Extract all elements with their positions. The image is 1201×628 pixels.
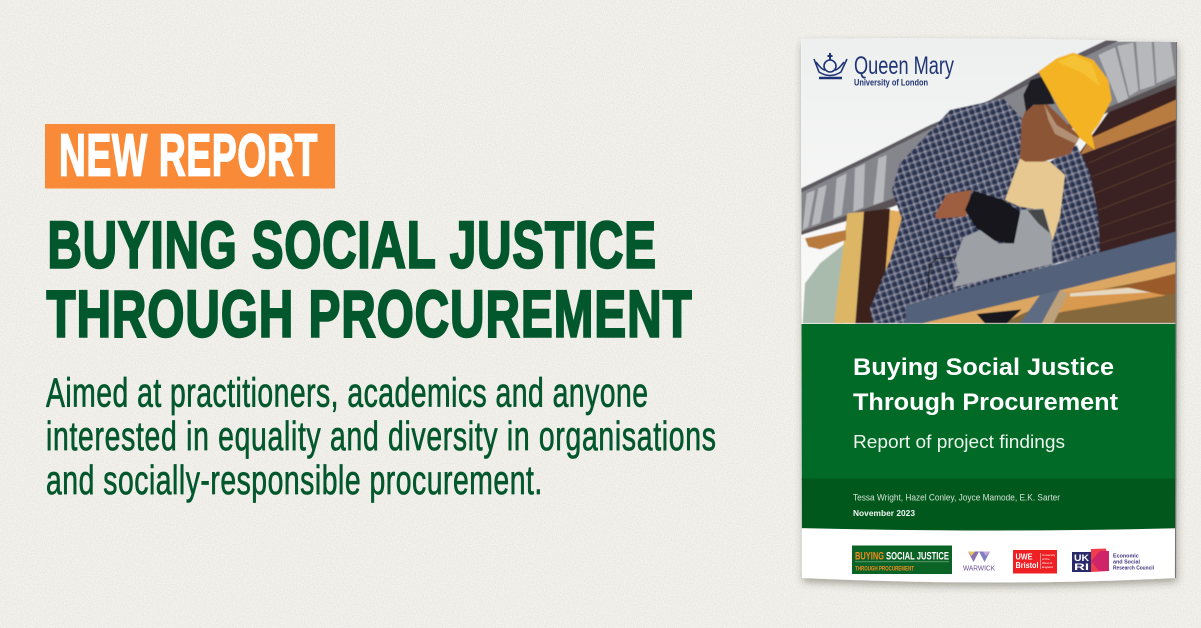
safety glasses	[1044, 104, 1079, 143]
ground under timber	[922, 260, 1176, 323]
logo: Queen Mary University of London	[814, 52, 954, 88]
logo: Queen Mary University of London: University of London	[854, 78, 928, 88]
logo: UWE Bristol	[1013, 550, 1057, 574]
logo: UKRI ESRC: and Social	[1113, 560, 1140, 566]
title	[46, 209, 692, 351]
title: THROUGH PROCUREMENT	[46, 278, 692, 351]
description text: and socially-responsible procurement.	[46, 458, 542, 503]
cover photo: construction worker with jigsaw	[801, 37, 1177, 324]
glove	[965, 191, 1022, 244]
dark wood underside	[1077, 83, 1177, 253]
cover date: November 2023	[853, 508, 915, 518]
title: BUYING SOCIAL JUSTICE	[48, 209, 656, 282]
logo: UWE Bristol: West of	[1042, 561, 1052, 565]
logo: UKRI ESRC: Economic	[1113, 554, 1139, 560]
timber	[922, 262, 1176, 323]
jigsaw	[953, 208, 1052, 287]
tree	[803, 243, 845, 323]
hair	[1023, 77, 1055, 112]
icon: crown	[814, 53, 847, 78]
logo: Buying Social Justice	[852, 546, 952, 574]
roof edge	[801, 40, 1118, 193]
right edge shade	[1176, 42, 1177, 578]
orange beam	[1080, 99, 1177, 155]
description text: Aimed at practitioners, academics and anyone	[46, 371, 648, 416]
logo: UWE Bristol: University	[1042, 553, 1056, 557]
posts	[834, 212, 864, 323]
face and neck	[1020, 103, 1080, 162]
logo: UKRI ESRC: UK	[1074, 553, 1090, 563]
cover authors: Tessa Wright, Hazel Conley, Joyce Mamode, E.K. Sarter	[853, 492, 1060, 502]
logo: Buying Social Justice: SOCIAL JUSTICE	[886, 550, 949, 562]
logo: Buying Social Justice: THROUGH PROCUREMENT	[855, 566, 914, 572]
logo: Warwick	[963, 552, 995, 572]
badge: new report: NEW REPORT	[59, 123, 317, 189]
shirt	[870, 98, 1100, 323]
logo: UKRI ESRC: Research Council	[1113, 566, 1154, 572]
logo: Queen Mary University of London: Queen Mary	[854, 52, 954, 80]
logo: UKRI ESRC	[1072, 548, 1154, 572]
logo: UWE Bristol: of the	[1042, 557, 1050, 561]
steel beam	[905, 232, 1176, 323]
steel strut	[1020, 290, 1060, 323]
logo: Warwick: WARWICK	[963, 564, 995, 572]
dark green author band	[795, 478, 1185, 530]
logo: UWE Bristol: Bristol	[1016, 561, 1038, 570]
roof	[801, 42, 1177, 233]
forearm	[935, 190, 972, 219]
description text: interested in equality and diversity in organisations	[46, 414, 716, 459]
cover heading: Through Procurement	[853, 389, 1118, 416]
cover subtitle: Report of project findings	[853, 431, 1065, 452]
logo: UKRI ESRC: RI	[1074, 562, 1089, 572]
hard hat	[1038, 53, 1112, 150]
description text	[46, 371, 716, 503]
undershirt	[1005, 158, 1065, 241]
cover heading: Buying Social Justice	[853, 354, 1114, 381]
logo: Buying Social Justice: BUYING	[855, 550, 884, 562]
logo: UWE Bristol: UWE	[1016, 552, 1033, 562]
logo: UWE Bristol: England	[1042, 565, 1053, 569]
cover heading	[853, 354, 1118, 416]
report cover	[795, 30, 1185, 590]
green title panel	[795, 324, 1185, 480]
